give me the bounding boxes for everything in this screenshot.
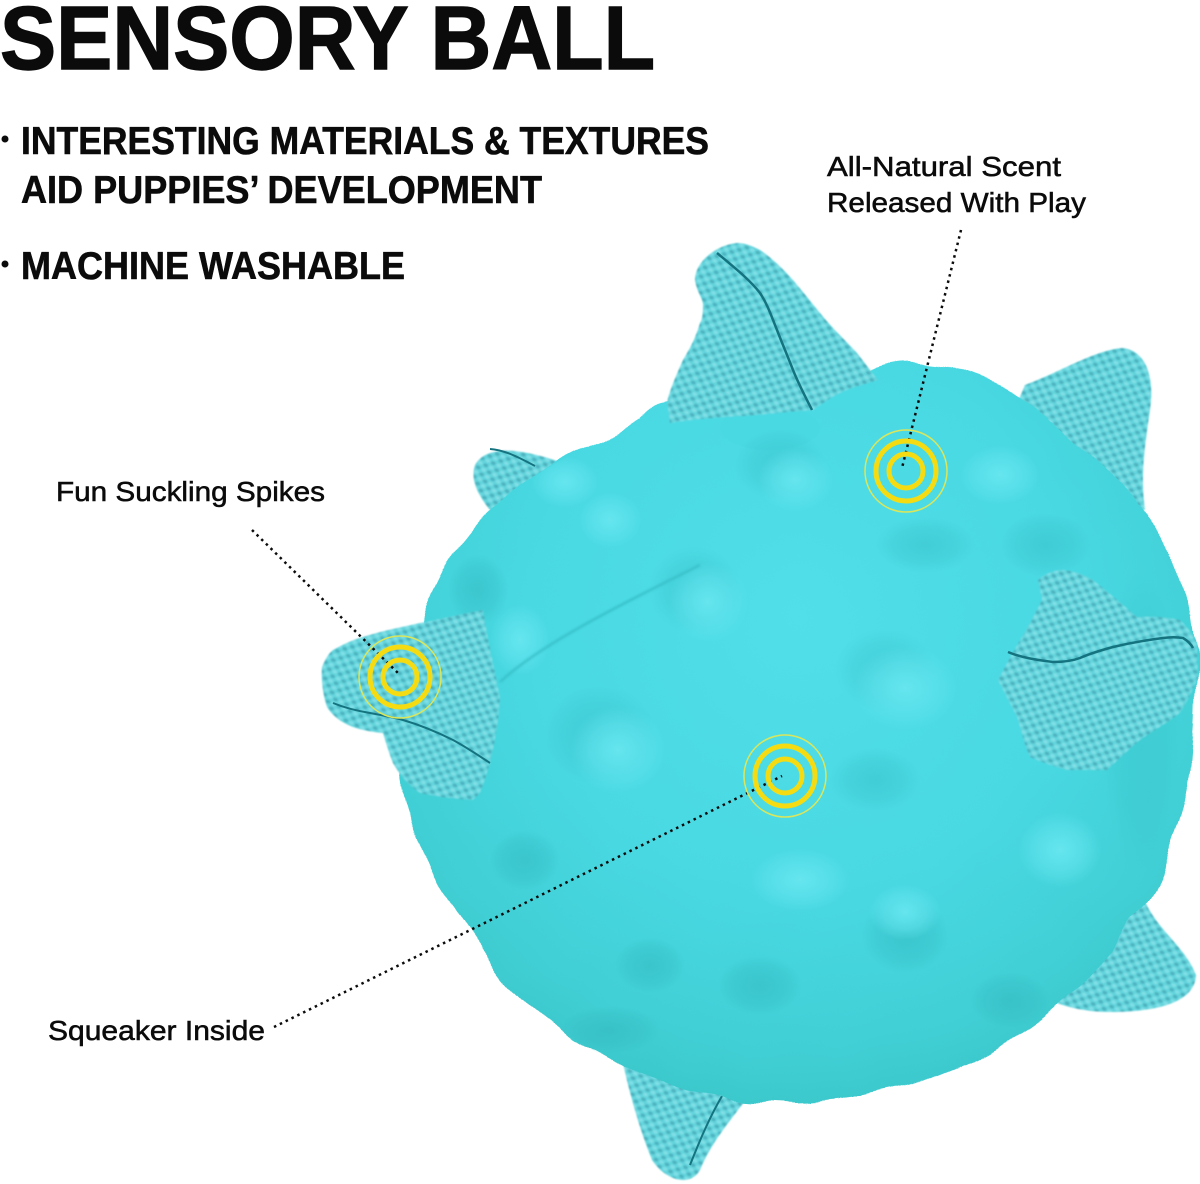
seam [500,565,700,682]
sensory ball illustration [322,243,1198,1180]
callout: squeaker inside: Squeaker Inside [48,1015,265,1046]
spike: left [322,610,500,800]
callout: all-natural scent: Released With Play [827,187,1086,218]
spike: bottom [620,1050,765,1180]
callout: fun suckling spikes: Fun Suckling Spikes [56,476,325,507]
target marker [359,636,441,718]
ball fill under top spike [720,406,820,450]
callout: fun suckling spikes [56,476,441,718]
bullet 2: MACHINE WASHABLE [21,245,405,288]
spike: upper left small [473,449,560,520]
bullet 1 [2,120,709,212]
bullet 1: INTERESTING MATERIALS & TEXTURES [21,120,709,163]
callout: squeaker inside [48,735,826,1046]
bullet list [2,120,709,288]
spike: right patch [998,570,1198,770]
target marker [744,735,826,817]
spike: lower right [1020,892,1196,1012]
ball body [400,361,1195,1102]
surface bumps [448,429,1180,1054]
spike: upper right [1010,348,1151,510]
callout: all-natural scent: All-Natural Scent [827,151,1061,182]
callout: all-natural scent [827,151,1086,512]
target marker [865,430,947,512]
bullet 1: AID PUPPIES’ DEVELOPMENT [21,169,542,212]
spike: top [667,243,878,423]
